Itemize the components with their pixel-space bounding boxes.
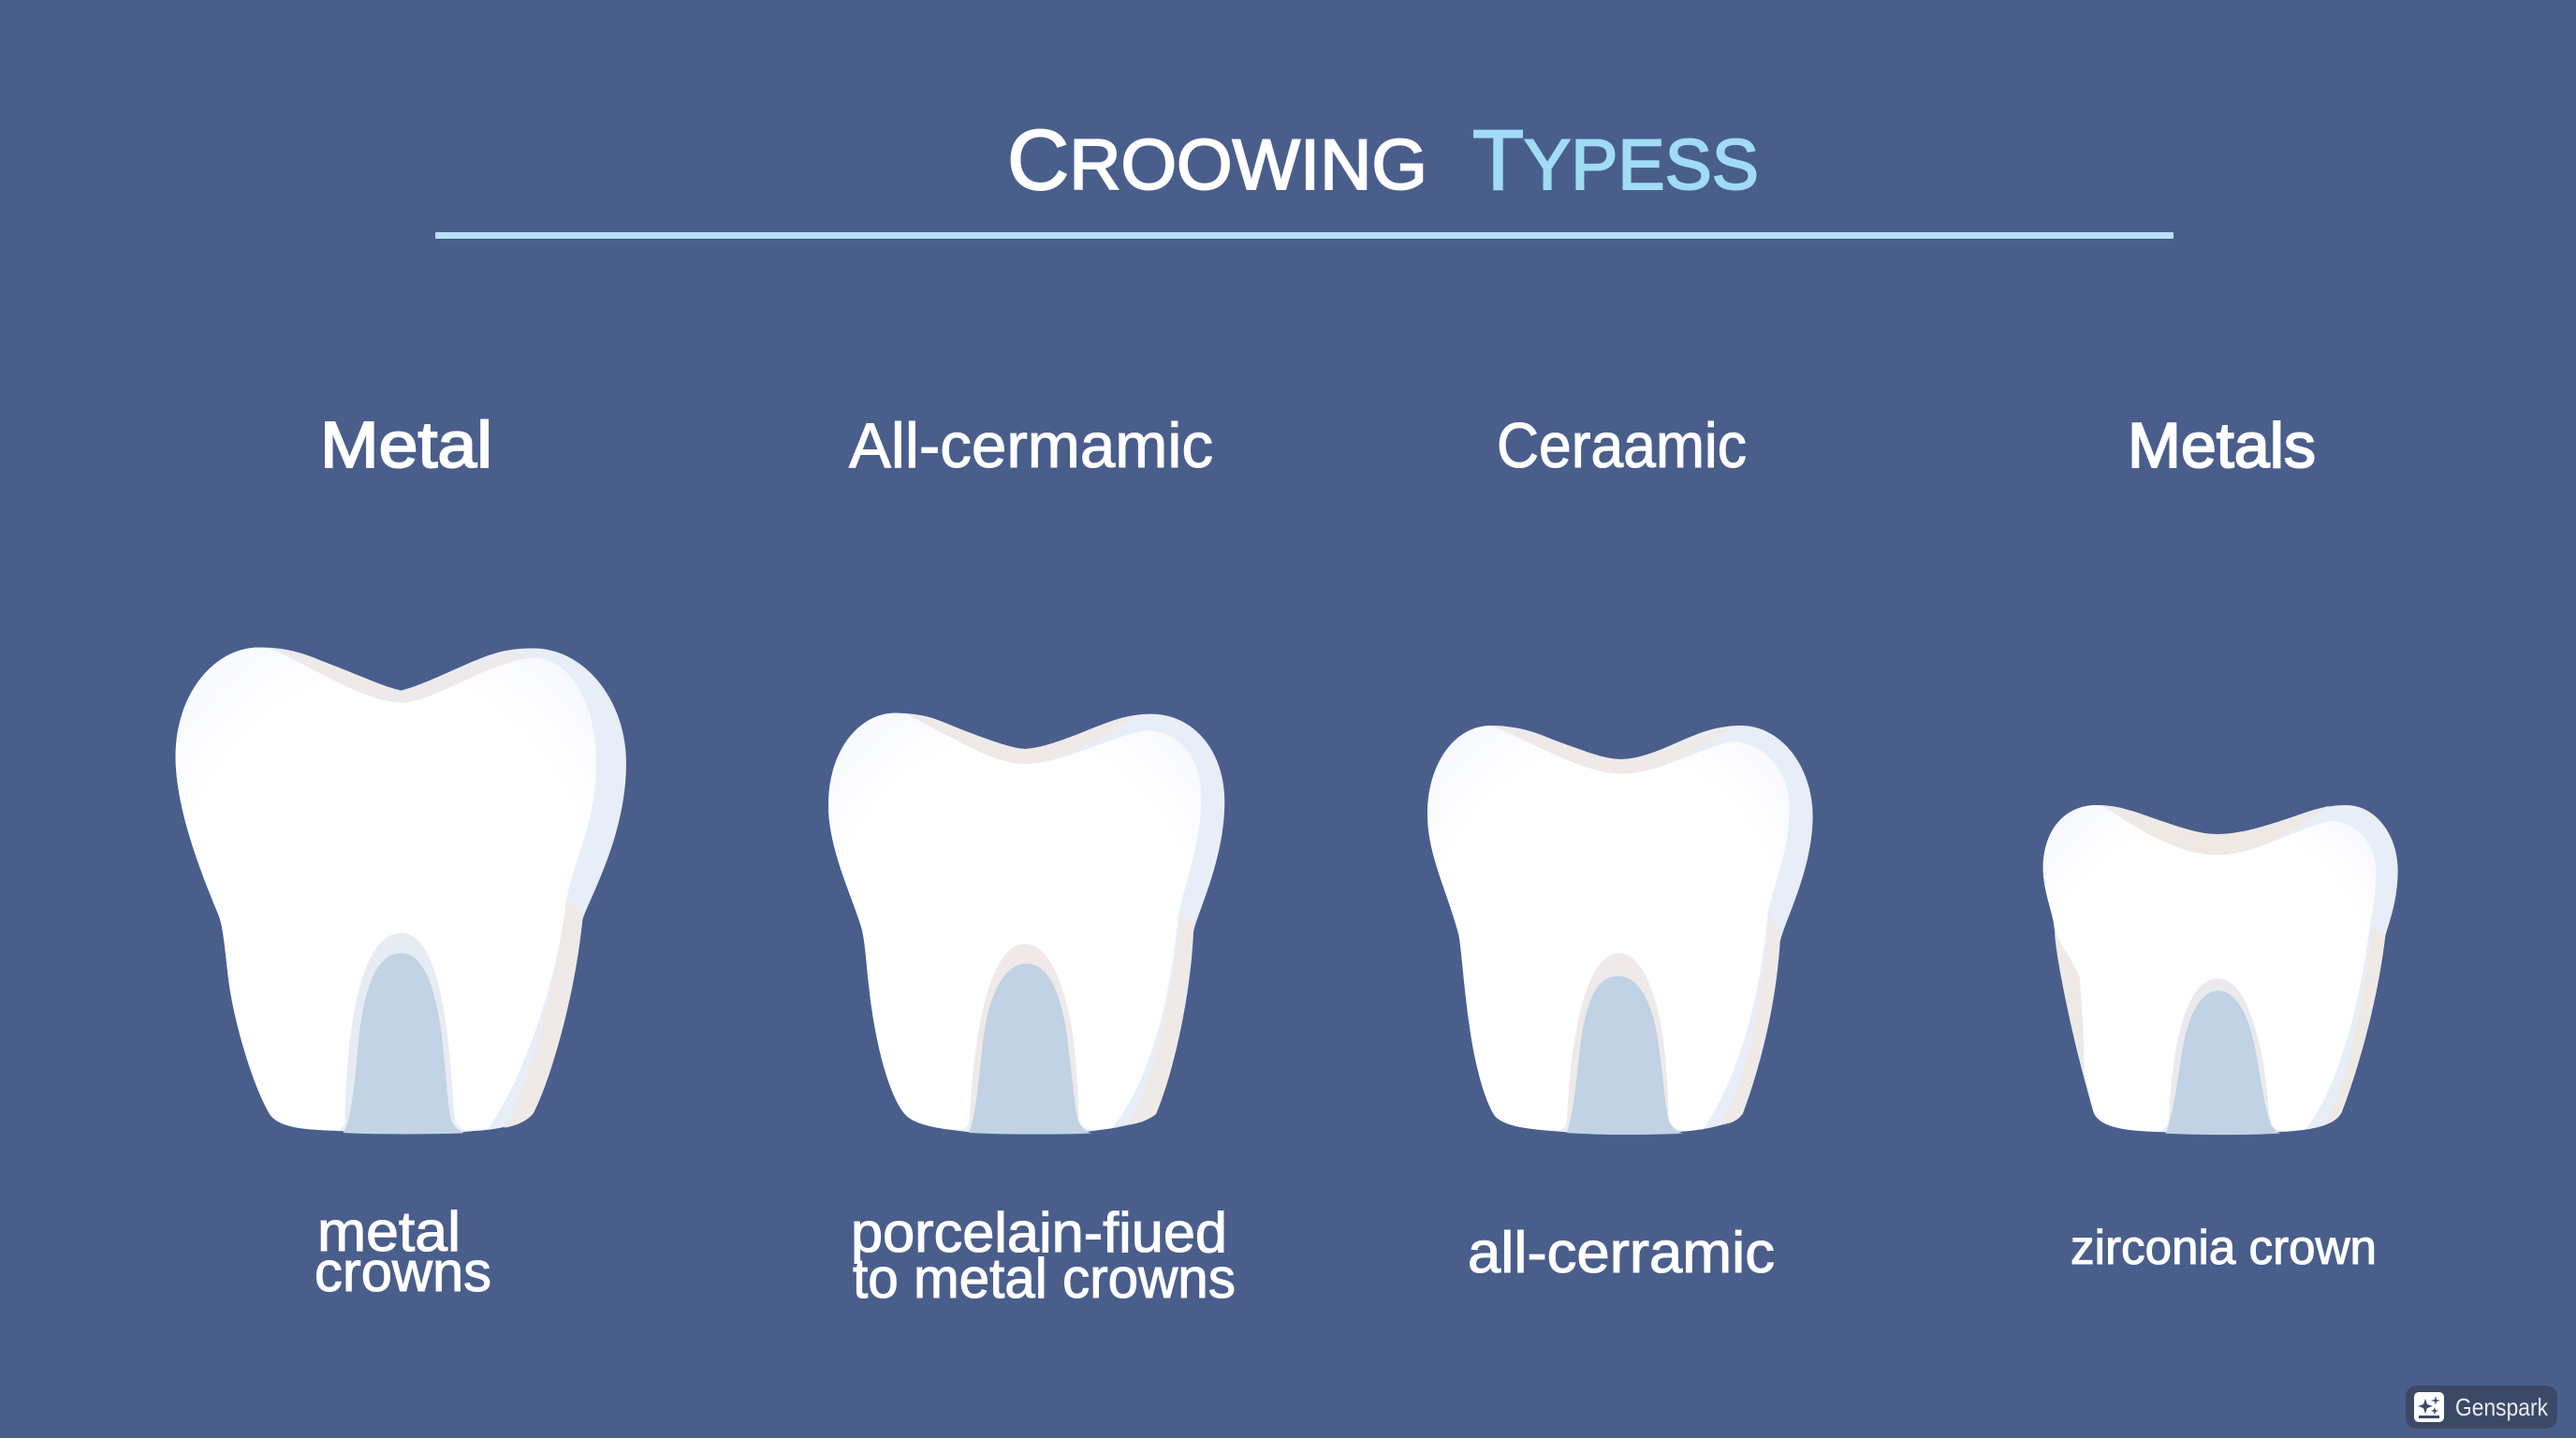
icon: tooth 4 [2043, 805, 2398, 1135]
column headings [320, 408, 2316, 481]
label: metal crowns: crowns [315, 1240, 491, 1303]
title [1007, 113, 1759, 208]
title: TYPESS [1472, 113, 1759, 208]
heading: Metals: Metals [2128, 410, 2316, 481]
title: CROOWING [1007, 113, 1427, 208]
icon: tooth 1 [176, 647, 626, 1134]
heading: Metal: Metal [320, 408, 492, 481]
heading: All-cermamic: All-cermamic [849, 410, 1213, 481]
label: zirconia crown: zirconia crown [2071, 1221, 2377, 1275]
label: metal crowns [315, 1200, 491, 1303]
crown labels [315, 1200, 2377, 1310]
icon: tooth 3 [1427, 726, 1813, 1135]
label: all-cerramic: all-cerramic [1468, 1221, 1775, 1285]
heading: Ceraamic: Ceraamic [1497, 410, 1747, 481]
title underline [435, 232, 2174, 239]
icon: tooth 2 [828, 713, 1224, 1135]
watermark badge: Genspark [2455, 1393, 2549, 1421]
watermark badge [2406, 1386, 2557, 1429]
label: porcelain-fiued to metal crowns: to metal crowns [853, 1247, 1236, 1310]
label: metal crowns: metal [317, 1200, 461, 1263]
icon: sparkle logo [2414, 1392, 2444, 1422]
label: porcelain-fiued to metal crowns [851, 1201, 1236, 1310]
label: porcelain-fiued to metal crowns: porcelain-fiued [851, 1201, 1227, 1264]
